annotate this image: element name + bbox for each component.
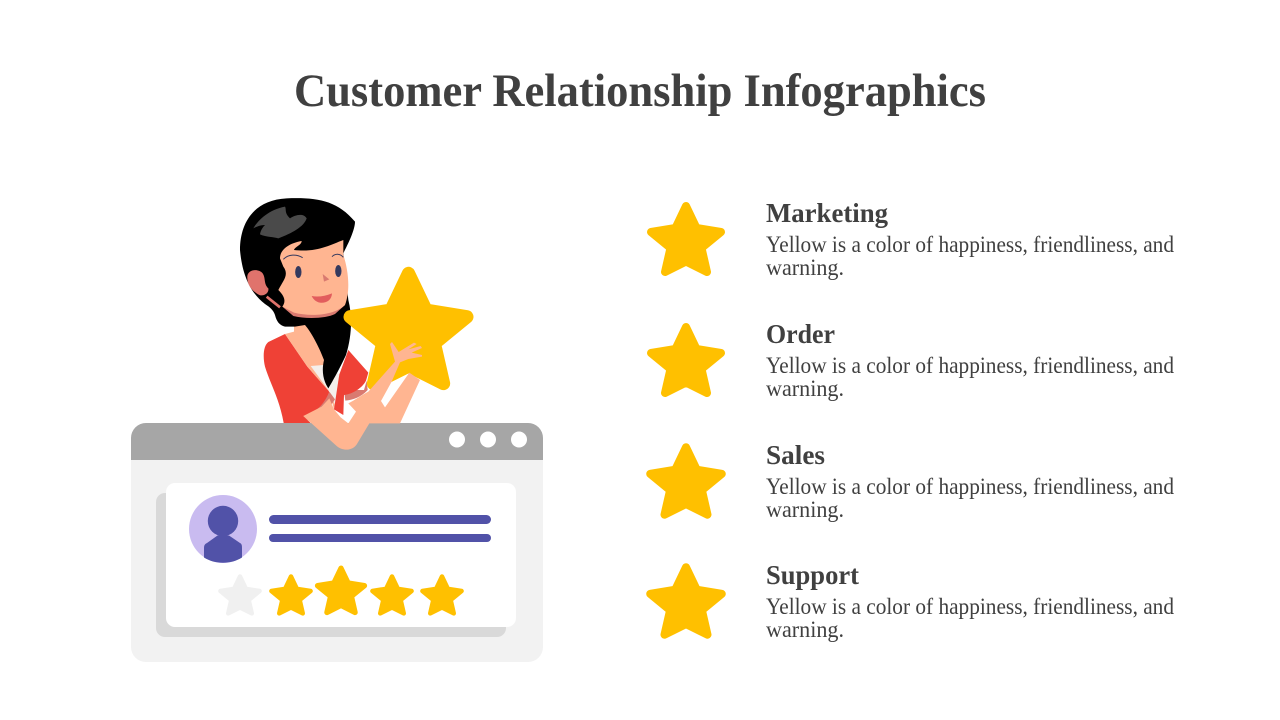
description: warning. [766,497,844,522]
panel: support item [650,560,1174,642]
eyes [295,266,301,278]
description: Yellow is a color of happiness, friendliness, and [766,353,1174,378]
icon: filled star 3 [372,576,412,613]
illustration: woman holding a star [240,198,467,450]
earring [267,297,280,307]
description: warning. [766,376,844,401]
chin shadow [282,305,345,318]
icon: filled star 4 [422,576,462,613]
description: warning. [766,617,844,642]
icon: user avatar [189,495,257,563]
collar accent [314,331,320,338]
panel: order item [651,319,1174,401]
icon: star [651,206,721,272]
ear [247,270,268,295]
hair [240,198,355,388]
heading: Sales [766,440,825,470]
hair highlight [253,207,307,238]
icon: star [650,567,722,635]
window body [131,423,543,662]
heading: Order [766,319,835,349]
icon: empty star [220,576,260,613]
panel: marketing item [651,198,1174,280]
card shadow [156,493,506,637]
neck and chest [285,315,339,409]
description: Yellow is a color of happiness, friendliness, and [766,474,1174,499]
description: Yellow is a color of happiness, friendliness, and [766,232,1174,257]
eyebrows [283,254,343,259]
window control dots [449,432,527,448]
shirt [311,365,339,405]
review text lines [269,515,491,542]
nose [323,274,329,282]
icon: filled star 1 [271,576,311,613]
sleeve shadow left [303,392,335,420]
jacket left side [264,334,329,423]
mouth [312,293,332,303]
description: warning. [766,255,844,280]
description: Yellow is a color of happiness, friendliness, and [766,594,1174,619]
sleeve shadow right [344,381,368,401]
arms and hand [303,342,422,450]
heading: Support [766,560,859,590]
jacket right lapel [334,350,368,415]
title: Customer Relationship Infographics [294,65,986,117]
window header bar [131,423,543,460]
face [278,240,348,315]
icon: filled star 2 [318,568,364,612]
big star [350,273,467,383]
icon: star [651,327,721,393]
panel: browser window with review card [131,423,543,662]
panel: sales item [650,440,1174,522]
heading: Marketing [766,198,888,228]
rating stars [220,568,462,613]
icon: star [650,447,722,515]
review card [166,483,516,627]
